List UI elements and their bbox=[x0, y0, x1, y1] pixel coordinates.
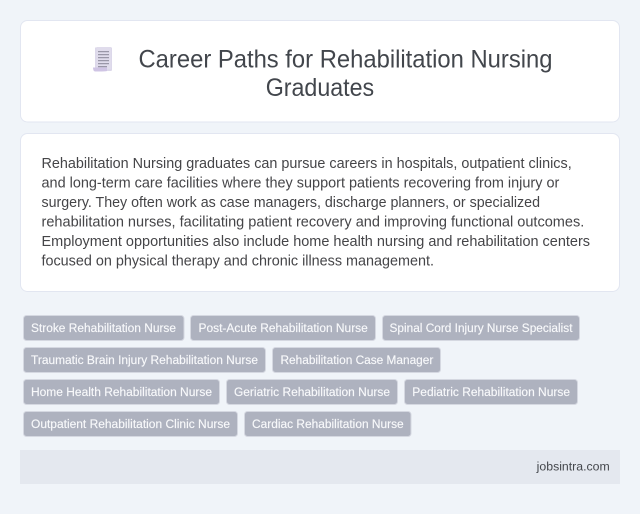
tag: case manager bbox=[272, 348, 440, 372]
tag: pediatric bbox=[404, 380, 578, 404]
description paragraph: focused on physical therapy and chronic illness management. bbox=[42, 253, 434, 269]
title text bbox=[138, 46, 552, 102]
tag: home health: Home Health Rehabilitation Nurse bbox=[31, 385, 212, 399]
tag: stroke bbox=[24, 316, 184, 340]
description paragraph: and long-term care facilities where they support patients recovering from injury or bbox=[42, 176, 560, 192]
title text: Career Paths for Rehabilitation Nursing bbox=[138, 46, 552, 74]
tag list bbox=[24, 316, 580, 436]
tag: post-acute: Post-Acute Rehabilitation Nurse bbox=[198, 321, 368, 335]
tag: geriatric: Geriatric Rehabilitation Nurse bbox=[234, 385, 390, 399]
description paragraph bbox=[42, 156, 590, 269]
description paragraph: surgery. They often work as case managers, discharge planners, or specialized bbox=[42, 195, 540, 211]
tag: cardiac bbox=[244, 412, 411, 436]
tag: stroke: Stroke Rehabilitation Nurse bbox=[31, 321, 176, 335]
panel: description card bbox=[20, 134, 620, 292]
tag: outpatient bbox=[24, 412, 238, 436]
tag: geriatric bbox=[226, 380, 398, 404]
footer source text: jobsintra.com bbox=[536, 460, 610, 474]
title text: Graduates bbox=[266, 74, 374, 102]
description paragraph: Employment opportunities also include home health nursing and rehabilitation centers bbox=[42, 234, 590, 250]
icon: document scroll bbox=[93, 47, 112, 72]
tag: traumatic brain injury bbox=[24, 348, 266, 372]
description paragraph: rehabilitation nurses, facilitating patient recovery and improving functional outcomes. bbox=[42, 214, 584, 230]
footer bar bbox=[20, 450, 620, 484]
description paragraph: Rehabilitation Nursing graduates can pursue careers in hospitals, outpatient clinics, bbox=[42, 156, 572, 172]
tag: case manager: Rehabilitation Case Manager bbox=[280, 353, 433, 367]
tag: home health bbox=[24, 380, 220, 404]
tag: outpatient: Outpatient Rehabilitation Clinic Nurse bbox=[31, 417, 230, 431]
panel: title card bbox=[20, 20, 620, 122]
tag: cardiac: Cardiac Rehabilitation Nurse bbox=[252, 417, 404, 431]
tag: post-acute bbox=[190, 316, 376, 340]
tag: pediatric: Pediatric Rehabilitation Nurse bbox=[412, 385, 570, 399]
tag: spinal cord bbox=[382, 316, 580, 340]
tag: traumatic brain injury: Traumatic Brain Injury Rehabilitation Nurse bbox=[31, 353, 258, 367]
tag: spinal cord: Spinal Cord Injury Nurse Specialist bbox=[390, 321, 573, 335]
